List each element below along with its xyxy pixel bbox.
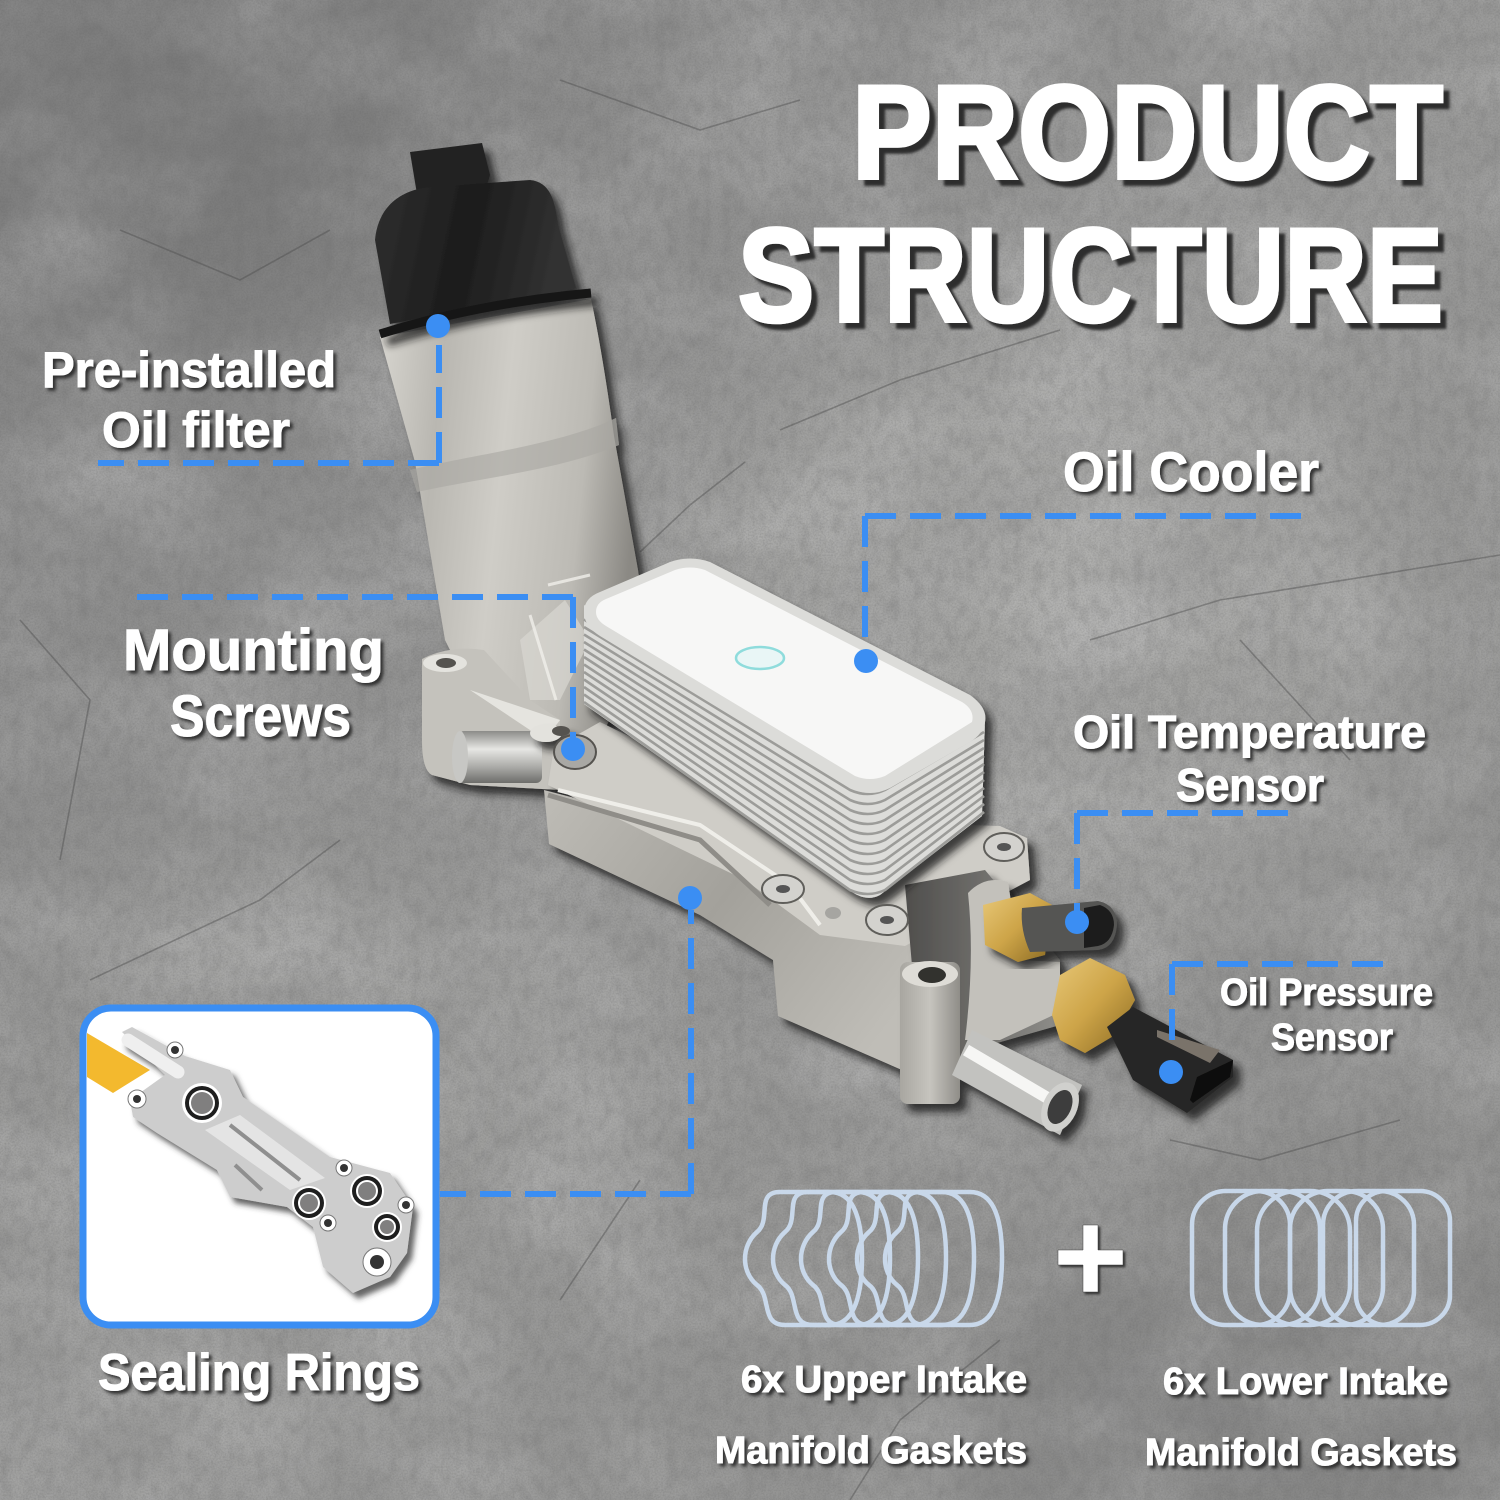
marker dot: [1159, 1060, 1183, 1084]
yellow handle: [87, 1033, 150, 1093]
marker dot: [426, 314, 450, 338]
base plate and lower body: [530, 722, 1030, 1070]
product: oil filter housing and cooler assembly: [375, 143, 1233, 1138]
bolts: [554, 735, 1024, 935]
filter housing body: [380, 299, 648, 790]
sealing ring: [182, 1083, 222, 1123]
hole centers: [133, 1046, 410, 1269]
label: Mounting: [123, 618, 384, 683]
marker dot: [561, 737, 585, 761]
title: [738, 59, 1443, 350]
lower intake gaskets: [1192, 1191, 1450, 1325]
manifold part: [122, 1027, 413, 1293]
marker dot: [1065, 910, 1089, 934]
label: lower gaskets: Manifold Gaskets: [1145, 1432, 1457, 1474]
label: Oil Temperature: [1073, 706, 1426, 758]
label: Oil filter: [102, 402, 290, 458]
oil cooler: [584, 558, 985, 898]
pressure sensor: [1052, 958, 1233, 1113]
plus sign: [1058, 1225, 1123, 1292]
upper intake gaskets: [745, 1192, 1002, 1325]
panel: sealing rings photo: [83, 1008, 436, 1325]
label: upper gaskets: Manifold Gaskets: [715, 1430, 1027, 1472]
leader line: [1077, 813, 1290, 912]
sealing ring: [292, 1186, 326, 1220]
label: lower gaskets: 6x Lower Intake: [1163, 1361, 1448, 1403]
label: upper gaskets: 6x Upper Intake: [741, 1359, 1027, 1401]
label: Screws: [170, 684, 351, 749]
callout: oil pressure sensor: [1159, 964, 1433, 1084]
label: upper gaskets: [715, 1359, 1027, 1472]
title: PRODUCT: [852, 59, 1443, 207]
mounting holes: [128, 1042, 414, 1276]
label: Sensor: [1176, 759, 1324, 811]
callout: sealing rings leader: [440, 886, 702, 1194]
label: [123, 618, 384, 749]
label: sealing rings: Sealing Rings: [98, 1344, 420, 1402]
callout: oil temperature sensor: [1065, 706, 1426, 934]
label: Sensor: [1271, 1017, 1393, 1059]
label: lower gaskets: [1145, 1361, 1457, 1474]
leader line: [98, 345, 439, 463]
leader line: [124, 597, 573, 740]
label: Pre-installed: [42, 342, 336, 398]
callout: oil cooler: [854, 440, 1319, 673]
marker dot: [678, 886, 702, 910]
filter cap: [375, 143, 591, 334]
label: Oil Pressure: [1220, 972, 1433, 1014]
temperature sensor: [983, 893, 1117, 962]
callout: mounting screws: [123, 597, 585, 761]
marker dot: [854, 649, 878, 673]
leader line: [440, 910, 691, 1194]
leader line: [865, 516, 1308, 650]
label: Oil Cooler: [1063, 440, 1319, 503]
sealing ring: [350, 1174, 384, 1208]
side housing with ports: [900, 870, 1086, 1138]
label: [42, 342, 336, 458]
leader line: [1172, 964, 1383, 1045]
label: [1073, 706, 1426, 811]
sealing ring: [372, 1212, 402, 1242]
label: [1220, 972, 1433, 1059]
callout: pre-installed oil filter: [42, 314, 450, 463]
